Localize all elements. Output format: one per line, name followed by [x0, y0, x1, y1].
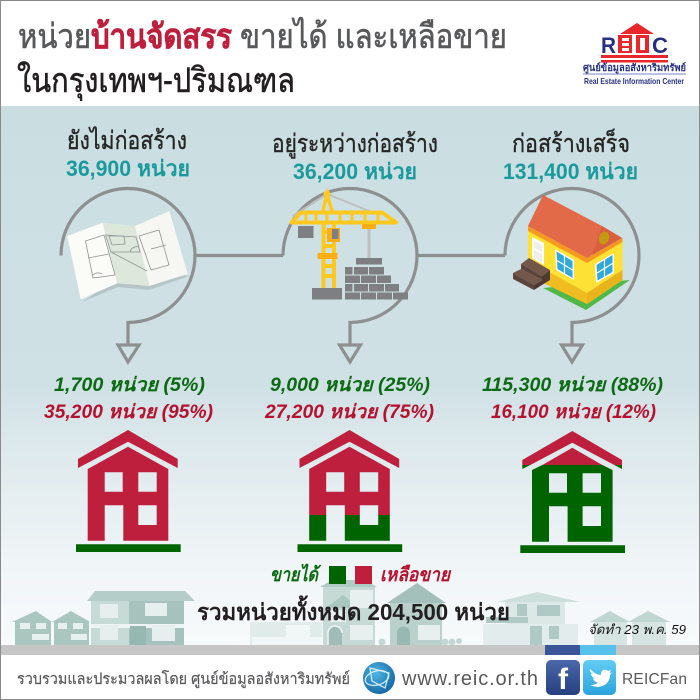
crane jib	[292, 212, 396, 222]
column 3 heading: ก่อสร้างเสร็จ	[512, 128, 630, 158]
crane base	[312, 288, 342, 300]
fence beside mansion	[250, 622, 322, 645]
arc 3	[505, 188, 639, 345]
steps	[534, 270, 550, 290]
statistics column 1	[44, 375, 213, 423]
roof	[528, 195, 622, 258]
background street of houses	[12, 580, 670, 646]
statistics column 1: 35,200 หน่วย (95%)	[44, 402, 213, 423]
icon: facebook	[546, 660, 580, 696]
arrow 2	[340, 345, 360, 362]
crane cab	[327, 228, 340, 242]
small twin houses right	[590, 611, 670, 645]
legend	[270, 563, 452, 586]
icon: globe	[363, 662, 395, 694]
total units: รวมหน่วยทั้งหมด 204,500 หน่วย	[197, 595, 510, 625]
logo: REIC: ศูนย์ข้อมูลอสังหาริมทรัพย์	[583, 62, 686, 75]
column 2 heading: อยู่ระหว่างก่อสร้าง	[272, 130, 438, 159]
column 1 heading: ยังไม่ก่อสร้าง	[67, 126, 187, 155]
arc 1	[61, 188, 195, 345]
statistics column 3: 115,300 หน่วย (88%)	[482, 375, 663, 396]
column 3 heading: 131,400 หน่วย	[503, 159, 638, 184]
right house	[483, 592, 580, 645]
column 3 heading	[503, 128, 638, 184]
column 2 heading: 36,200 หน่วย	[293, 159, 417, 184]
legend: เหลือขาย	[380, 564, 452, 586]
footer band	[0, 645, 700, 655]
icon: tower crane and bricks	[292, 190, 408, 300]
icon: finished yellow house	[513, 195, 630, 310]
gabled house beside mansion	[378, 583, 462, 646]
icon: floor plan map	[67, 211, 189, 302]
small twin houses left	[12, 611, 90, 645]
statistics column 2: 27,200 หน่วย (75%)	[264, 402, 434, 423]
social handle: REICFan	[622, 671, 687, 688]
house icon: quarter sold	[298, 430, 402, 552]
connector: circles and arrows	[61, 188, 639, 362]
statistics column 2	[264, 375, 434, 423]
central mansion	[320, 580, 377, 645]
left window	[555, 249, 574, 280]
counterweight	[298, 226, 314, 238]
roof eave	[528, 226, 622, 263]
statistics column 3	[482, 375, 663, 423]
logo: REIC: C	[652, 33, 668, 58]
column 1 heading: 36,900 หน่วย	[66, 156, 190, 181]
crane mast	[323, 194, 335, 288]
arrow 3	[562, 345, 582, 362]
date note: จัดทำ 23 พ.ค. 59	[588, 622, 686, 637]
statistics column 3: 16,100 หน่วย (12%)	[491, 402, 656, 423]
logo: REIC: R	[601, 33, 616, 58]
door	[532, 237, 544, 265]
icon: twitter	[583, 660, 616, 695]
connector 1 to 2	[195, 254, 283, 257]
house icon: mostly sold	[520, 431, 625, 553]
page background	[0, 106, 700, 646]
footer credit: รวบรวมและประมวลผลโดย ศูนย์ข้อมูลอสังหาริมทรัพย์	[17, 670, 350, 689]
logo: REIC	[583, 23, 686, 86]
statistics column 1: 1,700 หน่วย (5%)	[54, 375, 205, 396]
right window	[595, 253, 614, 283]
title line 2: ในกรุงเทพฯ-ปริมณฑล	[17, 61, 295, 101]
large house left	[87, 591, 195, 645]
title line 1: หน่วยบ้านจัดสรร ขายได้ และเหลือขาย	[18, 17, 507, 56]
icon: facebook: f	[558, 663, 569, 696]
brick pile	[345, 258, 408, 300]
website: www.reic.or.th	[401, 668, 538, 690]
column 2 heading	[272, 130, 438, 184]
header: title	[17, 17, 507, 101]
connector 2 to 3	[417, 254, 505, 257]
arrow 1	[118, 345, 139, 362]
house walls	[528, 228, 587, 304]
statistics column 2: 9,000 หน่วย (25%)	[270, 375, 430, 396]
arc 2	[283, 188, 417, 345]
legend: ขายได้	[270, 563, 321, 586]
column 1 heading	[66, 126, 190, 181]
house icon: mostly unsold	[76, 430, 181, 552]
